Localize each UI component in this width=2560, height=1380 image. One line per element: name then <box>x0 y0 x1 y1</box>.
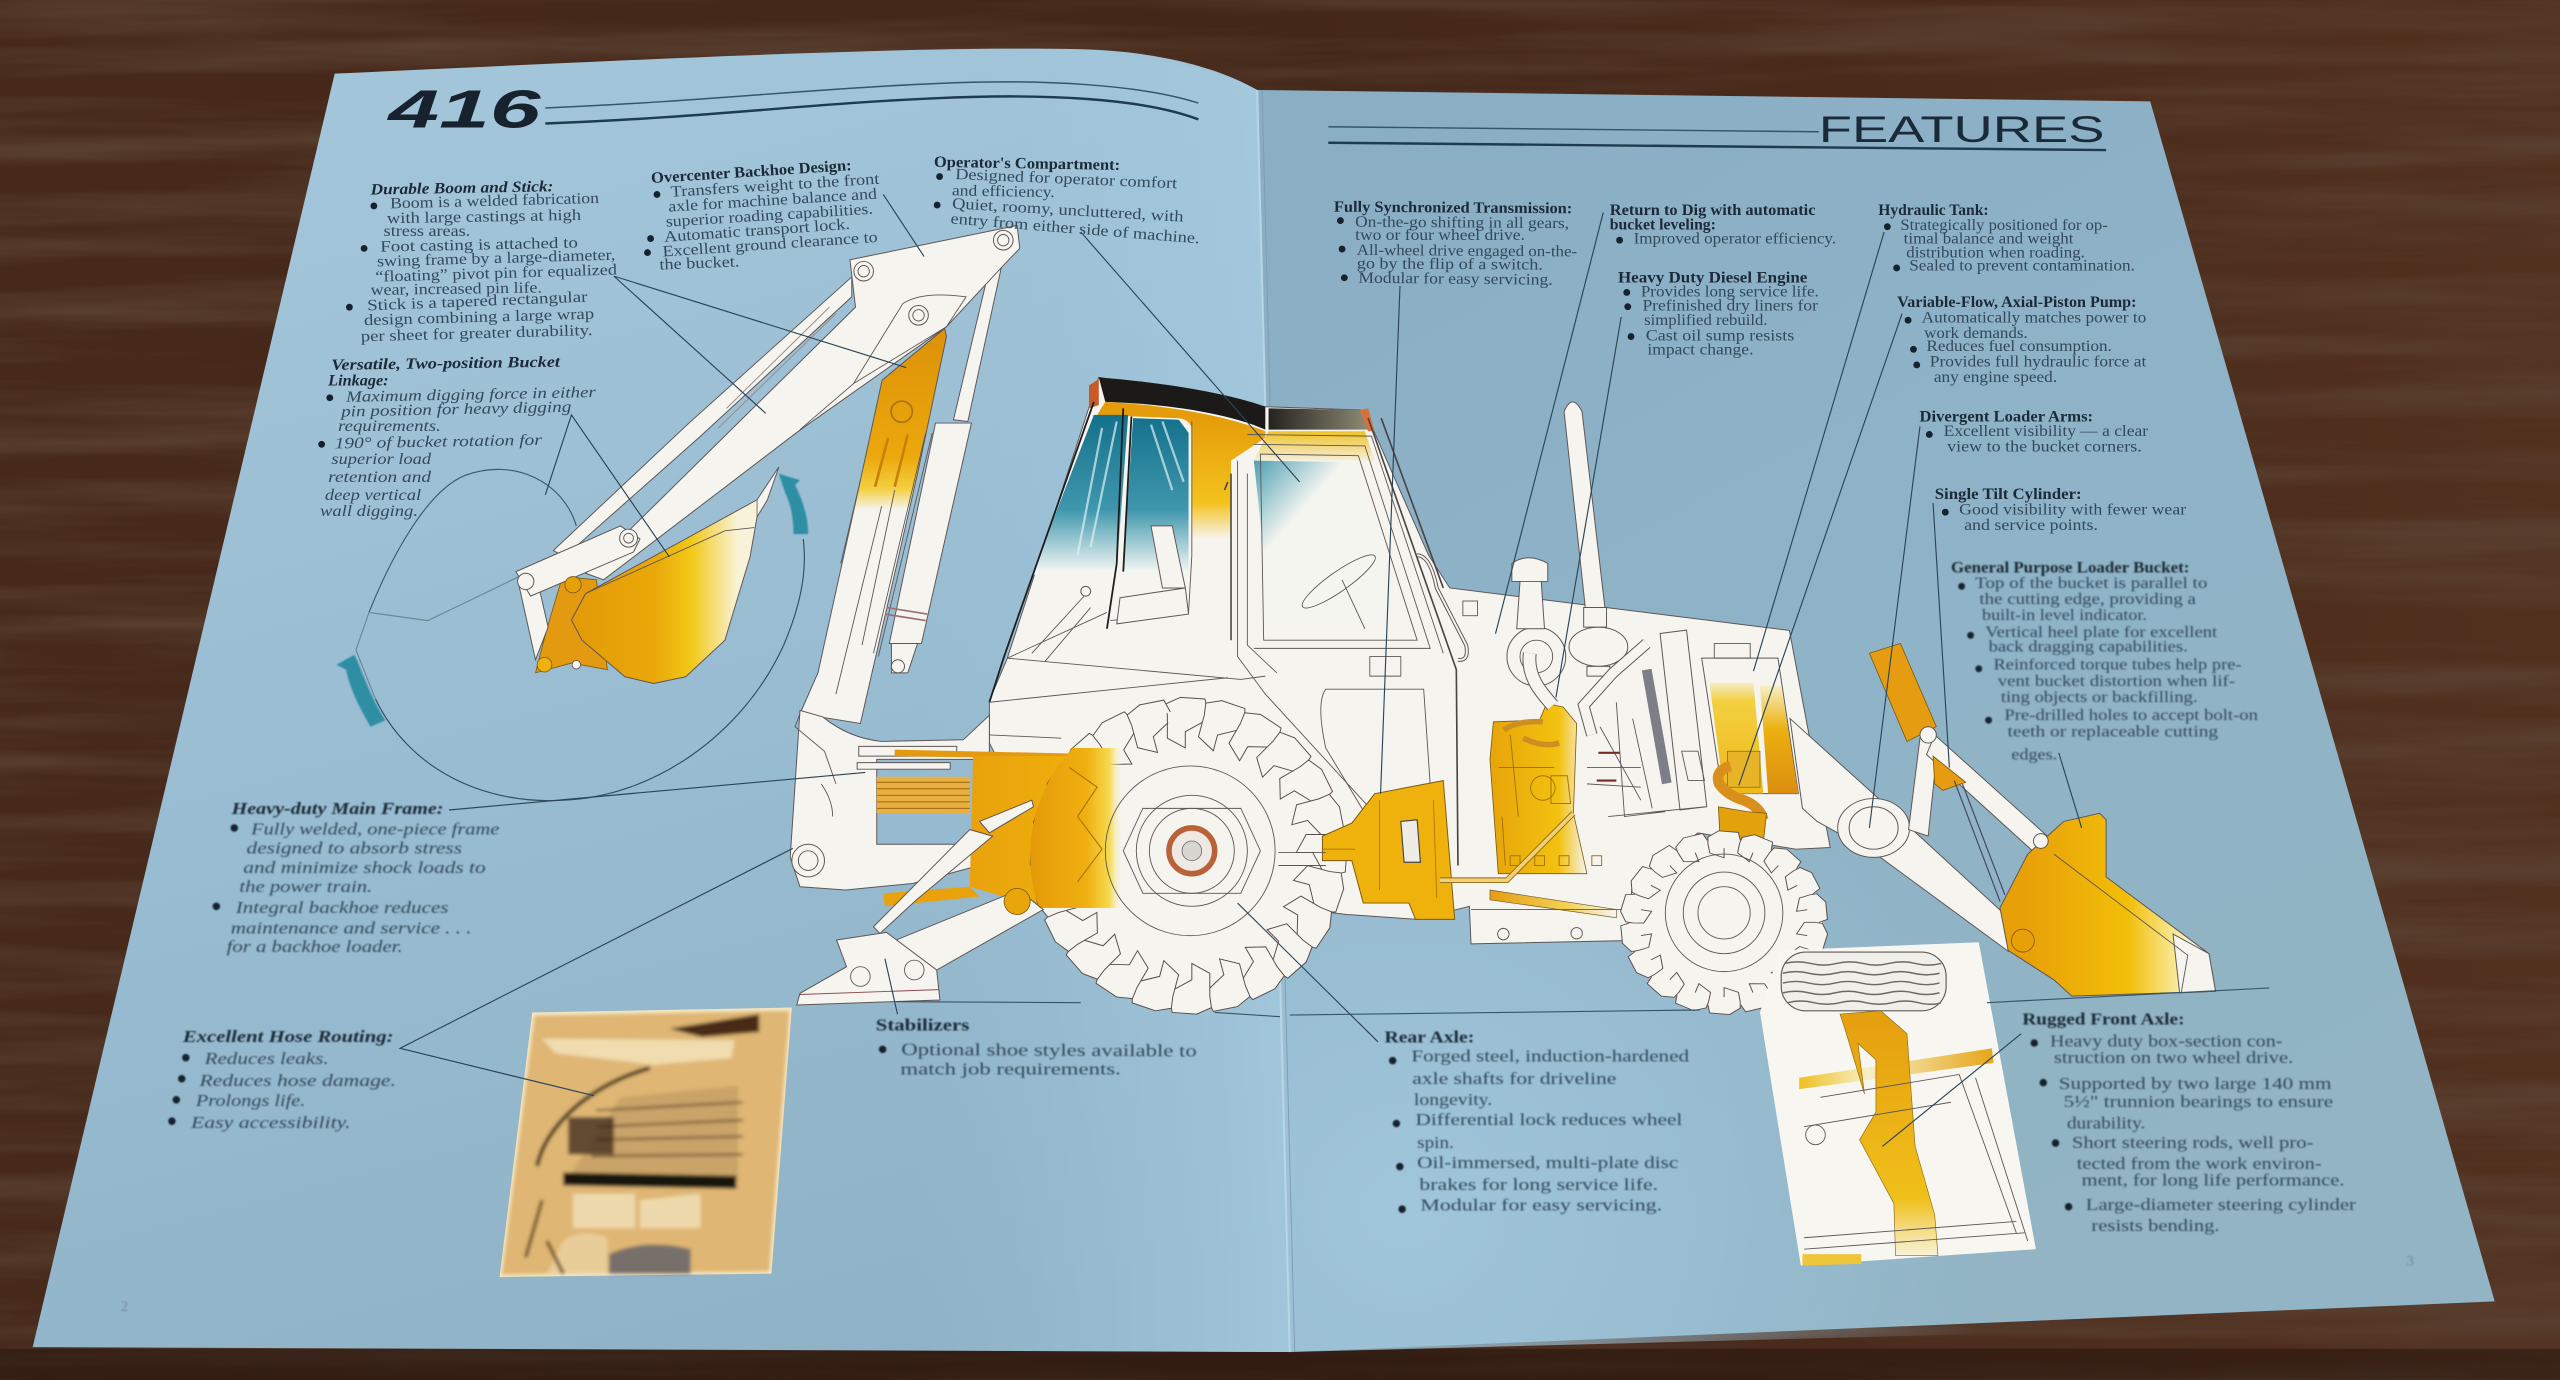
text: Stabilizers: match job requirements. <box>900 1059 1121 1078</box>
heading: Hydraulic Tank: <box>1878 202 1989 219</box>
title: FEATURES: FEATURES <box>1819 109 2104 150</box>
text: Durable Boom and Stick: stress areas. <box>384 223 470 240</box>
text: Hydraulic Tank: Strategically positioned for op- <box>1900 217 2108 234</box>
text: Overcenter Backhoe Design: Excellent ground clearance to <box>662 229 878 261</box>
illustration: rear wheel <box>1029 697 1347 1015</box>
hose to pump <box>1718 766 1763 820</box>
text: Single Tilt Cylinder: Good visibility with fewer wear <box>1959 501 2187 518</box>
text: Return to Dig: bucket leveling: <box>1610 216 1716 233</box>
heading: Durable Boom and Stick: <box>369 178 554 199</box>
heading: Heavy Duty Diesel Engine <box>1618 269 1807 286</box>
text: Rear Axle: brakes for long service life. <box>1419 1175 1658 1194</box>
text: Divergent Loader Arms <box>1920 408 2149 455</box>
heading: General Purpose Loader Bucket: <box>1951 559 2189 576</box>
text: General Purpose Loader Bucket: Vertical heel plate for excellent <box>1985 624 2218 641</box>
bucket linkage <box>519 586 548 660</box>
text: Excellent Hose Routing: Easy accessibility. <box>190 1113 351 1132</box>
text: Excellent Hose Routing <box>168 1027 396 1132</box>
text: Durable Boom and Stick: Foot casting is attached to <box>380 234 578 256</box>
text: Rugged Front Axle: Supported by two large 140 mm <box>2059 1074 2332 1093</box>
text: Heavy Duty Diesel Engine <box>1618 269 1819 358</box>
text: Single Tilt Cylinder: and service points. <box>1964 517 2098 534</box>
text: Operator's Compartment <box>934 154 1200 247</box>
heading: Operator's Compartment: <box>934 154 1120 174</box>
text: Heavy-duty Main Frame: Fully welded, one-piece frame <box>250 819 500 838</box>
panel: right brochure page <box>1257 90 2495 1352</box>
text: Fully Synchronized Transmission: On-the-go shifting in all gears, <box>1355 214 1569 232</box>
text: Operator's Compartment: and efficiency. <box>952 182 1055 201</box>
text: Return to Dig <box>1610 202 1836 247</box>
text: Variable-Flow, Axial-Piston Pump: Provides full hydraulic force at <box>1930 354 2147 371</box>
text: Fully Synchronized Transmission: go by the flip of a switch. <box>1357 255 1543 274</box>
text: Versatile, Two-position Bucket Linkage: wall digging. <box>320 503 418 520</box>
side window <box>1254 461 1404 629</box>
text: Excellent Hose Routing: Reduces hose damage. <box>198 1071 396 1090</box>
text: Heavy Duty Diesel Engine: Prefinished dry liners for <box>1642 297 1819 314</box>
text: Versatile, Two-position Bucket Linkage: requirements. <box>338 418 441 435</box>
text: Overcenter Backhoe Design: the bucket. <box>659 253 740 274</box>
text: Hydraulic Tank: timal balance and weight <box>1904 230 2074 247</box>
text: Overcenter Backhoe Design: axle for machine balance and <box>668 186 878 216</box>
dipper cylinder <box>553 277 852 557</box>
text: Heavy-duty Main Frame: maintenance and service . . . <box>231 918 472 937</box>
illustration: front wheel <box>1619 831 1829 1015</box>
text: Rugged Front Axle: Heavy duty box-section con- <box>2050 1032 2283 1051</box>
text: General Purpose Loader Bucket: teeth or replaceable cutting <box>2008 724 2218 741</box>
text: Versatile, Two-position Bucket Linkage: superior load <box>331 451 431 468</box>
text: Rear Axle: axle shafts for driveline <box>1412 1069 1617 1088</box>
text: General Purpose Loader Bucket: the cutting edge, providing a <box>1979 591 2196 608</box>
heading: Rear Axle: <box>1384 1028 1474 1047</box>
inset steering arm <box>1840 1011 1938 1256</box>
illustration: transmission <box>1278 781 1455 919</box>
page number right: 3 <box>2407 1254 2414 1270</box>
text: Durable Boom and Stick <box>346 178 617 345</box>
inset tire <box>1781 952 1946 1011</box>
text: Rear Axle: Modular for easy servicing. <box>1420 1195 1662 1214</box>
steering wheel <box>1297 548 1381 615</box>
heading: Heavy-duty Main Frame: <box>231 799 443 818</box>
heading: Divergent Loader Arms: <box>1920 408 2093 425</box>
illustration: loader arm and bucket <box>1790 643 2216 996</box>
text: Overcenter Backhoe Design: Transfers weight to the front <box>670 171 881 201</box>
text: Heavy-duty Main Frame: designed to absorb stress <box>247 839 462 858</box>
text: Operator's Compartment: Designed for operator comfort <box>955 166 1178 192</box>
text: Heavy-duty Main Frame <box>213 799 500 956</box>
heading: Overcenter Backhoe Design: <box>651 157 852 187</box>
text: Fully Synchronized Transmission: All-wheel drive engaged on-the- <box>1357 242 1577 260</box>
text: Single Tilt Cylinder <box>1935 486 2187 534</box>
text: Overcenter Backhoe Design: Automatic transport lock. <box>664 216 850 246</box>
text: Operator's Compartment: Quiet, roomy, uncluttered, with <box>952 195 1184 226</box>
callout leader lines <box>400 194 2082 1146</box>
text: Durable Boom and Stick: swing frame by a large-diameter, <box>377 247 616 270</box>
text: Rugged Front Axle: 5½" trunnion bearings to ensure <box>2064 1092 2333 1111</box>
inset axle <box>1799 1048 1993 1089</box>
heading: Single Tilt Cylinder: <box>1935 486 2082 503</box>
text: Versatile, Two-position Bucket Linkage: Linkage: <box>327 373 389 390</box>
text: Rear Axle: Oil-immersed, multi-plate disc <box>1417 1153 1679 1172</box>
text: Durable Boom and Stick: Boom is a welded fabrication <box>390 190 599 212</box>
text: General Purpose Loader Bucket <box>1951 559 2258 763</box>
heading: Variable-Flow, Axial-Piston Pump: <box>1897 294 2136 311</box>
text: Versatile, Two-position Bucket Linkage: retention and <box>328 469 431 486</box>
text: Rear Axle: spin. <box>1417 1133 1454 1152</box>
stick <box>586 226 1020 580</box>
text: Durable Boom and Stick: wear, increased pin life. <box>370 280 542 299</box>
muffler <box>1569 627 1628 666</box>
text: General Purpose Loader Bucket: edges. <box>2011 746 2057 763</box>
text: Operator's Compartment: entry from either side of machine. <box>950 210 1200 247</box>
hydraulic pump <box>1718 807 1767 843</box>
text: General Purpose Loader Bucket: Pre-drilled holes to accept bolt-on <box>2004 707 2258 724</box>
bucket swing arc with ghost bucket <box>356 469 804 801</box>
air cleaner <box>1512 558 1548 629</box>
turbo <box>1507 627 1566 686</box>
bucket <box>571 467 779 683</box>
cab roof, black <box>1099 377 1265 430</box>
inset photo: hose routing <box>500 1008 792 1277</box>
heading: Excellent Hose Routing: <box>182 1027 393 1046</box>
illustration: hydraulic tank <box>1702 643 1798 843</box>
text: Stabilizers <box>876 1015 1197 1078</box>
text: Hydraulic Tank <box>1878 202 2135 275</box>
text: Rugged Front Axle: tected from the work environ- <box>2077 1154 2322 1173</box>
text: General Purpose Loader Bucket: back dragging capabilities. <box>1989 639 2188 656</box>
illustration: engine <box>1440 402 1707 940</box>
text: Rugged Front Axle: ment, for long life performance. <box>2082 1171 2344 1190</box>
heading: Rugged Front Axle: <box>2022 1010 2184 1029</box>
text: Heavy-duty Main Frame: for a backhoe loader. <box>227 937 403 956</box>
text: General Purpose Loader Bucket: vent bucket distortion when lif- <box>1998 673 2235 690</box>
text: Variable-Flow, Axial-Piston Pump: Automatically matches power to <box>1922 310 2146 327</box>
lower door window <box>1321 689 1433 846</box>
lower frame rods <box>1440 813 1573 880</box>
text: Hydraulic Tank: Sealed to prevent contamination. <box>1909 258 2135 275</box>
levers <box>1032 596 1091 661</box>
text: Rugged Front Axle <box>2022 1010 2356 1235</box>
text: Versatile, Two-position Bucket Linkage: pin position for heavy digging <box>340 399 572 421</box>
text: Versatile, Two-position Bucket Linkage: Maximum digging force in either <box>345 384 597 406</box>
text: Overcenter Backhoe Design <box>644 157 881 274</box>
text: Rear Axle: Forged steel, induction-hardened <box>1411 1046 1689 1065</box>
hydraulic strut <box>873 265 1002 673</box>
title: 416 <box>387 80 1198 140</box>
seat <box>1117 526 1189 624</box>
text: Durable Boom and Stick: per sheet for greater durability. <box>360 322 593 345</box>
panel: left brochure page <box>33 49 1290 1352</box>
illustration: stabilizer leg <box>797 800 1043 1005</box>
heading: Stabilizers <box>876 1015 970 1034</box>
text: Fully Synchronized Transmission <box>1334 199 1577 289</box>
grab rail <box>1417 555 1467 660</box>
text: Versatile, Two-position Bucket Linkage <box>318 354 597 520</box>
text: Rear Axle: Differential lock reduces wheel <box>1416 1110 1683 1129</box>
text: General Purpose Loader Bucket: built-in level indicator. <box>1982 607 2147 624</box>
radiator <box>1660 630 1707 810</box>
text: Rugged Front Axle: resists bending. <box>2091 1216 2220 1235</box>
text: Heavy Duty Diesel Engine: simplified rebuild. <box>1644 312 1768 329</box>
text: Durable Boom and Stick: design combining a large wrap <box>364 306 594 329</box>
yellow cab pillar <box>1097 402 1265 555</box>
text: Heavy-duty Main Frame: the power train. <box>239 877 372 896</box>
text: Rear Axle: longevity. <box>1414 1090 1492 1109</box>
text: Rugged Front Axle: durability. <box>2067 1113 2145 1132</box>
heading: Return to Dig with automatic <box>1610 202 1816 219</box>
icon: teal rotation arrow, bucket <box>779 474 808 534</box>
heading: Versatile, Two-position Bucket <box>331 354 561 374</box>
title: FEATURES <box>1328 109 2106 150</box>
page number left: 2 <box>121 1299 128 1315</box>
exhaust stack <box>1564 402 1605 608</box>
text: Stabilizers: Optional shoe styles available to <box>901 1040 1197 1060</box>
text: General Purpose Loader Bucket: Top of the bucket is parallel to <box>1975 575 2208 592</box>
text: Durable Boom and Stick: Stick is a tapered rectangular <box>367 289 589 314</box>
text: Excellent Hose Routing: Prolongs life. <box>195 1091 305 1110</box>
text: Rugged Front Axle: Large-diameter steering cylinder <box>2086 1195 2356 1214</box>
rear window panes <box>1032 415 1128 575</box>
heading: Fully Synchronized Transmission: <box>1334 199 1572 217</box>
boom column <box>800 328 946 723</box>
title: 416: 416 <box>387 80 542 140</box>
loader bucket <box>2000 813 2216 996</box>
tilt cylinder <box>1869 643 1936 741</box>
text: Heavy Duty Diesel Engine: Cast oil sump resists <box>1646 328 1794 345</box>
text: Overcenter Backhoe Design: superior roading capabilities. <box>665 201 873 231</box>
text: Hydraulic Tank: distribution when roading. <box>1906 244 2085 261</box>
text: Variable-Flow, Axial-Piston Pump: any engine speed. <box>1934 369 2057 386</box>
text: Rear Axle <box>1384 1028 1689 1214</box>
text: Rugged Front Axle: struction on two wheel drive. <box>2054 1048 2293 1067</box>
text: Heavy-duty Main Frame: Integral backhoe reduces <box>235 898 449 917</box>
text: General Purpose Loader Bucket: ting objects or backfilling. <box>2001 689 2198 706</box>
ground lines <box>896 988 2269 1017</box>
text: Versatile, Two-position Bucket Linkage: 190° of bucket rotation for <box>334 432 543 452</box>
illustration: main machine body and cab <box>989 377 1830 944</box>
text: Heavy-duty Main Frame: and minimize shock loads to <box>243 858 486 877</box>
text: Durable Boom and Stick: “floating” pivot pin for equalized <box>375 262 617 286</box>
text: Variable-Flow, Axial-Piston Pump: work demands. <box>1924 325 2028 342</box>
text: Divergent Loader Arms: view to the bucket corners. <box>1947 438 2142 455</box>
text: Fully Synchronized Transmission: Modular for easy servicing. <box>1358 270 1553 289</box>
text: Variable-Flow, Axial-Piston Pump <box>1897 294 2147 386</box>
icon: teal rotation arrow, ghost bucket <box>336 655 385 727</box>
illustration: backhoe arm <box>516 226 1020 723</box>
text: Versatile, Two-position Bucket Linkage: deep vertical <box>325 487 421 504</box>
bucket bracket <box>536 577 607 673</box>
text: General Purpose Loader Bucket: Reinforced torque tubes help pre- <box>1993 657 2242 674</box>
text: Divergent Loader Arms: Excellent visibility — a clear <box>1944 423 2149 440</box>
text: Return to Dig: Improved operator efficiency. <box>1634 230 1836 247</box>
text: Durable Boom and Stick: with large castings at high <box>387 207 581 227</box>
text: Variable-Flow, Axial-Piston Pump: Reduces fuel consumption. <box>1927 338 2112 355</box>
text: Rugged Front Axle: Short steering rods, well pro- <box>2072 1133 2314 1152</box>
inset: front axle detail <box>1760 942 2036 1266</box>
illustration: main frame and hoses <box>790 710 1120 906</box>
text: Heavy Duty Diesel Engine: impact change. <box>1647 341 1753 358</box>
text: Fully Synchronized Transmission: two or four wheel drive. <box>1355 227 1525 244</box>
text: Heavy Duty Diesel Engine: Provides long service life. <box>1641 284 1819 301</box>
text: Excellent Hose Routing: Reduces leaks. <box>203 1049 329 1068</box>
